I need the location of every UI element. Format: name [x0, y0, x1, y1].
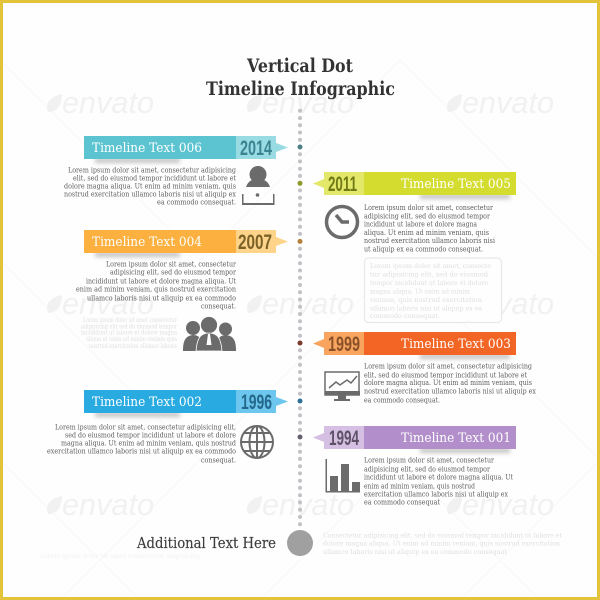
- text block 001: ea commodo consequat: [364, 498, 440, 506]
- text block 002: sed do eiusmod tempor incididunt ut labore et dolore: [65, 430, 236, 440]
- text block 001: enim ad minim veniam, quis nostrud: [364, 482, 475, 490]
- title: Vertical Dot: [246, 55, 353, 77]
- faded additional text: [323, 532, 563, 556]
- panel: 2011: [313, 172, 516, 322]
- icon: globe: [241, 426, 273, 458]
- faded additional text: dolore magna aliqua. Ut enim ad minim veniam, quis nostrud exercitation: [323, 540, 560, 548]
- panel: 2007: [76, 230, 288, 351]
- banner 004: [84, 230, 288, 257]
- icon: people: [183, 316, 236, 351]
- panel: 1996: [47, 390, 288, 464]
- watermark pattern: envato: [462, 286, 554, 321]
- text block 006: Lorem ipsum dolor sit amet, consectetur adipisicing: [68, 166, 236, 174]
- banner 004: 2007: [238, 231, 272, 254]
- watermark pattern: envato: [262, 85, 354, 120]
- icon: person at laptop: [242, 166, 274, 205]
- faded text box: tur adipisicing elit, sed do eiusmod: [370, 272, 488, 278]
- banner 003: [313, 332, 516, 359]
- text block 005: ut aliquip ex ea commodo consequat.: [364, 244, 483, 254]
- banner 002: 1996: [241, 391, 272, 414]
- timeline end dot: [287, 530, 313, 556]
- text block 004: incididunt ut labore et dolore magna aliqua. Ut: [86, 276, 236, 286]
- text block 003: Lorem ipsum dolor sit amet, consectetur adipisicing: [364, 362, 532, 370]
- banner 001: 1994: [329, 427, 359, 450]
- text block 002: magna aliqua. Ut enim ad minim veniam, quis nostrud: [61, 438, 236, 448]
- faded text 004: [81, 317, 177, 350]
- banner 006: 2014: [240, 137, 272, 160]
- faded caption: Lorem ipsum dolor sit amet consectetur adipisicing: [40, 553, 200, 560]
- faded additional text: ullamco laboris nisi ut aliquip ex ea commodo consequat: [323, 549, 508, 556]
- banner 006: Timeline Text 006: [92, 141, 202, 156]
- text block 004: adipisicing elit, sed do eiusmod tempor: [110, 268, 236, 276]
- text block 001: incididunt ut labore et dolore magna aliqua. Ut: [364, 472, 513, 482]
- icon: clock: [326, 206, 358, 238]
- faded text box: ullamco laboris nisi ut aliquip ex ea: [370, 306, 482, 312]
- text block 006: nostrud exercitation ullamco laboris nisi ut aliquip ex: [64, 190, 236, 198]
- text block 003: nostrud exercitation ullamco laboris nisi ut aliquip ex: [364, 386, 536, 396]
- text block 004: Lorem ipsum dolor sit amet, consectetur: [106, 260, 236, 268]
- faded additional text: Consectetur adipisicing elit, sed do eiusmod tempor incididunt ut labore et: [323, 532, 563, 540]
- text block 005: incididunt ut labore et dolore magna: [364, 220, 478, 228]
- watermark pattern: envato: [62, 286, 154, 321]
- banner 005: 2011: [328, 173, 357, 196]
- text block 005: Lorem ipsum dolor sit amet, consectetur: [364, 203, 493, 212]
- banner 005: Timeline Text 005: [401, 177, 511, 192]
- faded text 004: nostrud exercitation ullamco laboris: [89, 343, 177, 350]
- text block 002: Lorem ipsum dolor sit amet, consectetur adipisicing elit,: [55, 422, 236, 432]
- text block 004: ullamco laboris nisi ut aliquip ex ea commodo: [87, 294, 236, 302]
- text block 006: [64, 166, 236, 206]
- text block 005: adipisicing elit, sed do eiusmod tempor: [364, 212, 490, 220]
- icon: monitor chart: [324, 372, 360, 401]
- banner 001: Timeline Text 001: [401, 431, 511, 446]
- text block 005: [364, 203, 496, 254]
- text block 003: elit, sed do eiusmod tempor incididunt ut labore et: [364, 370, 527, 380]
- banner 004: Timeline Text 004: [92, 235, 202, 250]
- text block 006: dolore magna aliqua. Ut enim ad minim veniam, quis: [64, 182, 236, 190]
- faded text 004: incididunt ut labore et dolore magna: [81, 330, 177, 336]
- text block 003: dolore magna aliqua. Ut enim ad minim veniam, quis: [364, 378, 532, 387]
- text block 005: aliqua. Ut enim ad minim veniam, quis: [364, 228, 489, 237]
- text block 006: ea commodo consequat.: [157, 198, 236, 206]
- additional text heading: Additional Text Here: [136, 536, 276, 552]
- banner 005: [313, 172, 516, 199]
- watermark pattern: envato: [262, 286, 354, 321]
- text block 001: exercitation ullamco laboris nisi ut aliquip ex: [364, 490, 508, 498]
- faded text 004: aliqua ut enim ad minim veniam quis: [86, 336, 177, 343]
- faded text box: [364, 258, 502, 322]
- dotted timeline: [298, 109, 302, 526]
- faded text box: Lorem ipsum dolor sit amet, consecte: [370, 263, 491, 270]
- watermark pattern: envato: [462, 85, 554, 120]
- faded text box: magna aliqua. Ut enim ad minim: [370, 288, 470, 296]
- panel: 2014: [64, 136, 288, 206]
- title: [206, 55, 395, 100]
- banner 002: Timeline Text 002: [92, 395, 202, 410]
- text block 004: [76, 260, 236, 310]
- banner 001: [313, 426, 516, 453]
- faded text box: veniam, quis nostrud exercitation: [369, 297, 482, 304]
- text block 002: exercitation ullamco laboris nisi ut aliquip ex ea commodo: [47, 446, 236, 456]
- banner 002: [84, 390, 288, 417]
- watermark pattern: envato: [262, 487, 354, 522]
- faded text box: commodo consequat.: [370, 313, 440, 320]
- banner 003: 1999: [328, 333, 360, 356]
- faded text 004: Lorem ipsum dolor sit amet consectetur: [83, 317, 177, 324]
- panel: 1999: [313, 332, 536, 404]
- text block 002: [47, 422, 236, 464]
- text block 005: nostrud exercitation ullamco laboris nisi: [364, 236, 496, 245]
- banner 006: [84, 136, 288, 163]
- text block 001: adipisicing elit, sed do eiusmod tempor: [364, 464, 490, 474]
- text block 004: consequat.: [201, 302, 236, 310]
- watermark pattern: envato: [462, 487, 554, 522]
- text block 002: consequat.: [201, 456, 236, 464]
- title: Timeline Infographic: [206, 78, 395, 100]
- text block 003: [364, 362, 536, 404]
- text block 001: Lorem ipsum dolor sit amet, consectetur: [364, 456, 494, 464]
- icon: bar chart: [326, 459, 360, 492]
- text block 006: elit, sed do eiusmod tempor incididunt ut labore et: [73, 174, 236, 182]
- banner 003: Timeline Text 003: [401, 337, 511, 352]
- text block 003: ea commodo consequat.: [364, 396, 440, 404]
- text block 004: enim ad minim veniam, quis nostrud exercitation: [76, 284, 236, 294]
- watermark pattern: envato: [62, 487, 154, 522]
- watermark pattern: envato: [62, 85, 154, 120]
- panel: 1994: [313, 426, 516, 506]
- faded text box: tempor incididunt ut labore et dolore: [370, 280, 488, 287]
- text block 001: [364, 456, 513, 506]
- faded text 004: adipisicing elit sed do eiusmod tempor: [81, 324, 177, 330]
